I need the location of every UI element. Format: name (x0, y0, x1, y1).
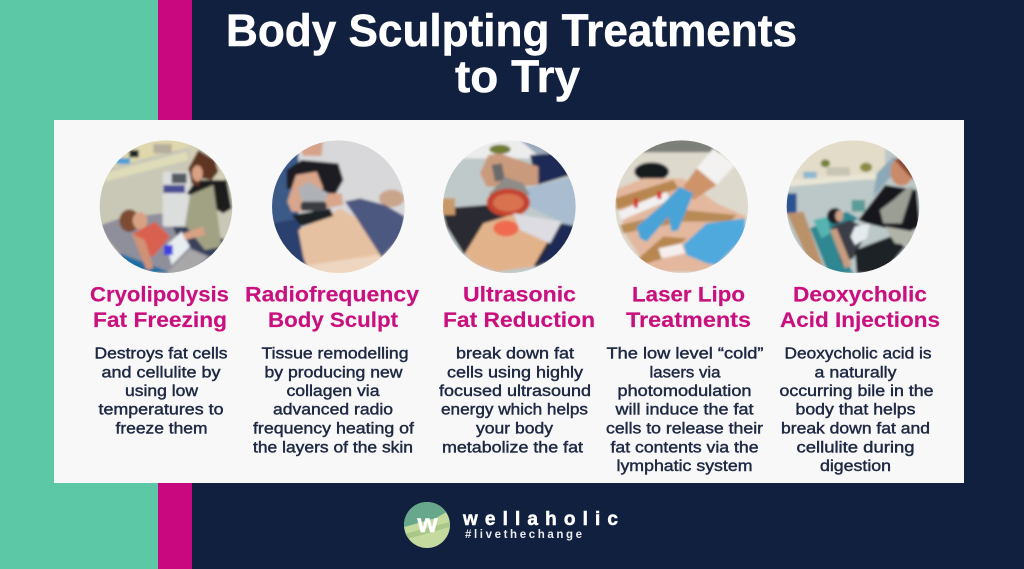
magenta side band (158, 0, 192, 569)
photo: ultrasonic treatment (443, 140, 576, 273)
logo: wellaholic (404, 502, 618, 548)
heading: Radiofrequency Body Sculpt: Radiofrequency (245, 284, 419, 306)
title: Body Sculpting Treatments (226, 5, 797, 56)
heading: Ultrasonic Fat Reduction: Ultrasonic (463, 284, 576, 306)
text: laser lipo description: The low level “cold” (606, 346, 764, 362)
text: ultrasonic description: metabolize the fat (442, 439, 584, 456)
text: deoxycholic acid description: digestion (820, 458, 891, 475)
text: cryolipolysis description: and cellulite by (102, 364, 221, 382)
text: laser lipo description: cells to release their (606, 420, 763, 438)
heading: Cryolipolysis Fat Freezing (90, 284, 229, 332)
text: deoxycholic acid description: Deoxycholic acid is (784, 346, 932, 362)
logo tagline: #livethechange (465, 529, 582, 541)
photo: radiofrequency treatment (270, 138, 407, 277)
heading: Laser Lipo Treatments: Treatments (626, 309, 751, 332)
text: cryolipolysis description: using low (125, 383, 199, 400)
heading: Deoxycholic Acid Injections (780, 284, 940, 332)
text: cryolipolysis description: freeze them (116, 420, 208, 438)
text: ultrasonic description: your body (476, 420, 553, 438)
panel: treatments (54, 120, 964, 483)
text: laser lipo description: lymphatic system (616, 458, 752, 475)
text: laser lipo description: photomodulation (618, 383, 752, 400)
photo: cryolipolysis treatment (97, 137, 237, 277)
photo: laser lipo treatment (613, 138, 750, 275)
heading: Deoxycholic Acid Injections: Deoxycholic (793, 284, 927, 306)
text: radiofrequency description: by producing new (264, 364, 403, 382)
text: laser lipo description (606, 346, 764, 475)
heading: Deoxycholic Acid Injections: Acid Injections (780, 309, 940, 332)
text: ultrasonic description (439, 346, 591, 456)
text: cryolipolysis description: temperatures to (98, 402, 224, 419)
logo mark: w (416, 508, 438, 538)
text: laser lipo description: fat contents via the (610, 439, 758, 456)
text: radiofrequency description: advanced radio (273, 402, 393, 419)
text: deoxycholic acid description: occurring bile in the (780, 383, 934, 400)
text: cryolipolysis description: Destroys fat cells (94, 346, 228, 362)
photo: deoxycholic acid treatment (785, 138, 922, 275)
title (226, 5, 797, 102)
heading: Ultrasonic Fat Reduction: Fat Reduction (443, 309, 595, 332)
heading: Radiofrequency Body Sculpt (245, 284, 419, 332)
heading: Laser Lipo Treatments: Laser Lipo (632, 284, 745, 306)
text: radiofrequency description: Tissue remodelling (262, 346, 408, 362)
text: deoxycholic acid description: break down fat and (781, 420, 930, 438)
text: ultrasonic description: cells using highly (447, 364, 583, 382)
text: laser lipo description: will induce the fat (614, 402, 754, 419)
text: ultrasonic description: energy which helps (441, 402, 588, 419)
title: to Try (455, 51, 580, 102)
text: cryolipolysis description (94, 346, 228, 438)
heading: Laser Lipo Treatments (626, 284, 751, 332)
text: ultrasonic description: focused ultrasound (439, 383, 591, 400)
text: radiofrequency description: collagen via (286, 383, 380, 400)
heading: Cryolipolysis Fat Freezing: Fat Freezing (93, 309, 227, 332)
logo wordmark: wellaholic (462, 509, 618, 530)
text: laser lipo description: lasers via (650, 364, 721, 382)
text: deoxycholic acid description: body that helps (796, 402, 916, 419)
heading: Radiofrequency Body Sculpt: Body Sculpt (268, 309, 398, 332)
heading: Ultrasonic Fat Reduction (443, 284, 595, 332)
heading: Cryolipolysis Fat Freezing: Cryolipolysis (90, 284, 229, 306)
logo mark (404, 502, 450, 548)
text: radiofrequency description: frequency heating of (253, 420, 415, 438)
text: deoxycholic acid description: cellulite during (796, 439, 914, 456)
teal side band (0, 0, 158, 569)
text: ultrasonic description: break down fat (456, 346, 575, 362)
text: radiofrequency description: the layers of the skin (253, 439, 413, 456)
text: deoxycholic acid description: a naturally (814, 364, 897, 382)
text: radiofrequency description (253, 346, 415, 456)
text: deoxycholic acid description (780, 346, 934, 475)
